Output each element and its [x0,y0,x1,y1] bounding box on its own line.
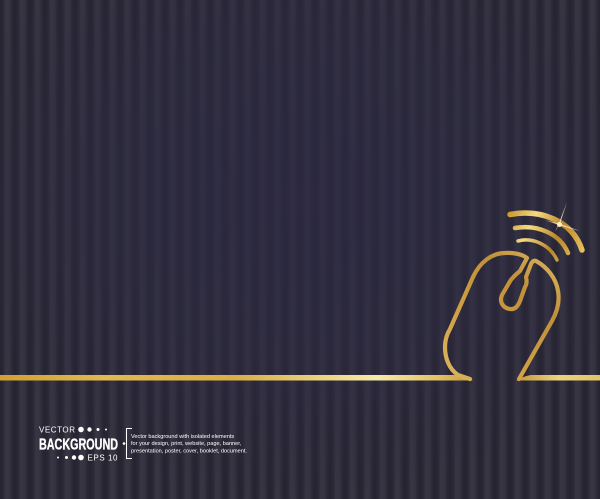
decorative dots top [78,427,107,432]
gold horizontal line left [0,375,473,380]
outer arc [510,213,582,250]
bracket [126,428,132,458]
icon: computer mouse [445,253,559,379]
gold horizontal line right [516,375,600,380]
BACKGROUND label: BACKGROUND [39,436,118,454]
logo text block [39,426,247,462]
icon: wifi signal arcs with sparkle [510,202,582,260]
EPS 10 label: EPS 10 [88,454,118,462]
decorative dots bottom [57,455,84,460]
middle arc [515,227,568,253]
inner arc [518,240,557,260]
description: presentation, poster, cover, booklet, document. [131,448,247,454]
description: Vector background with isolated elements [131,434,234,440]
description: for your design, print, website, page, banner, [131,441,242,447]
bracket pointer [123,442,125,445]
VECTOR label: VECTOR [39,426,75,434]
sparkle [545,202,580,232]
